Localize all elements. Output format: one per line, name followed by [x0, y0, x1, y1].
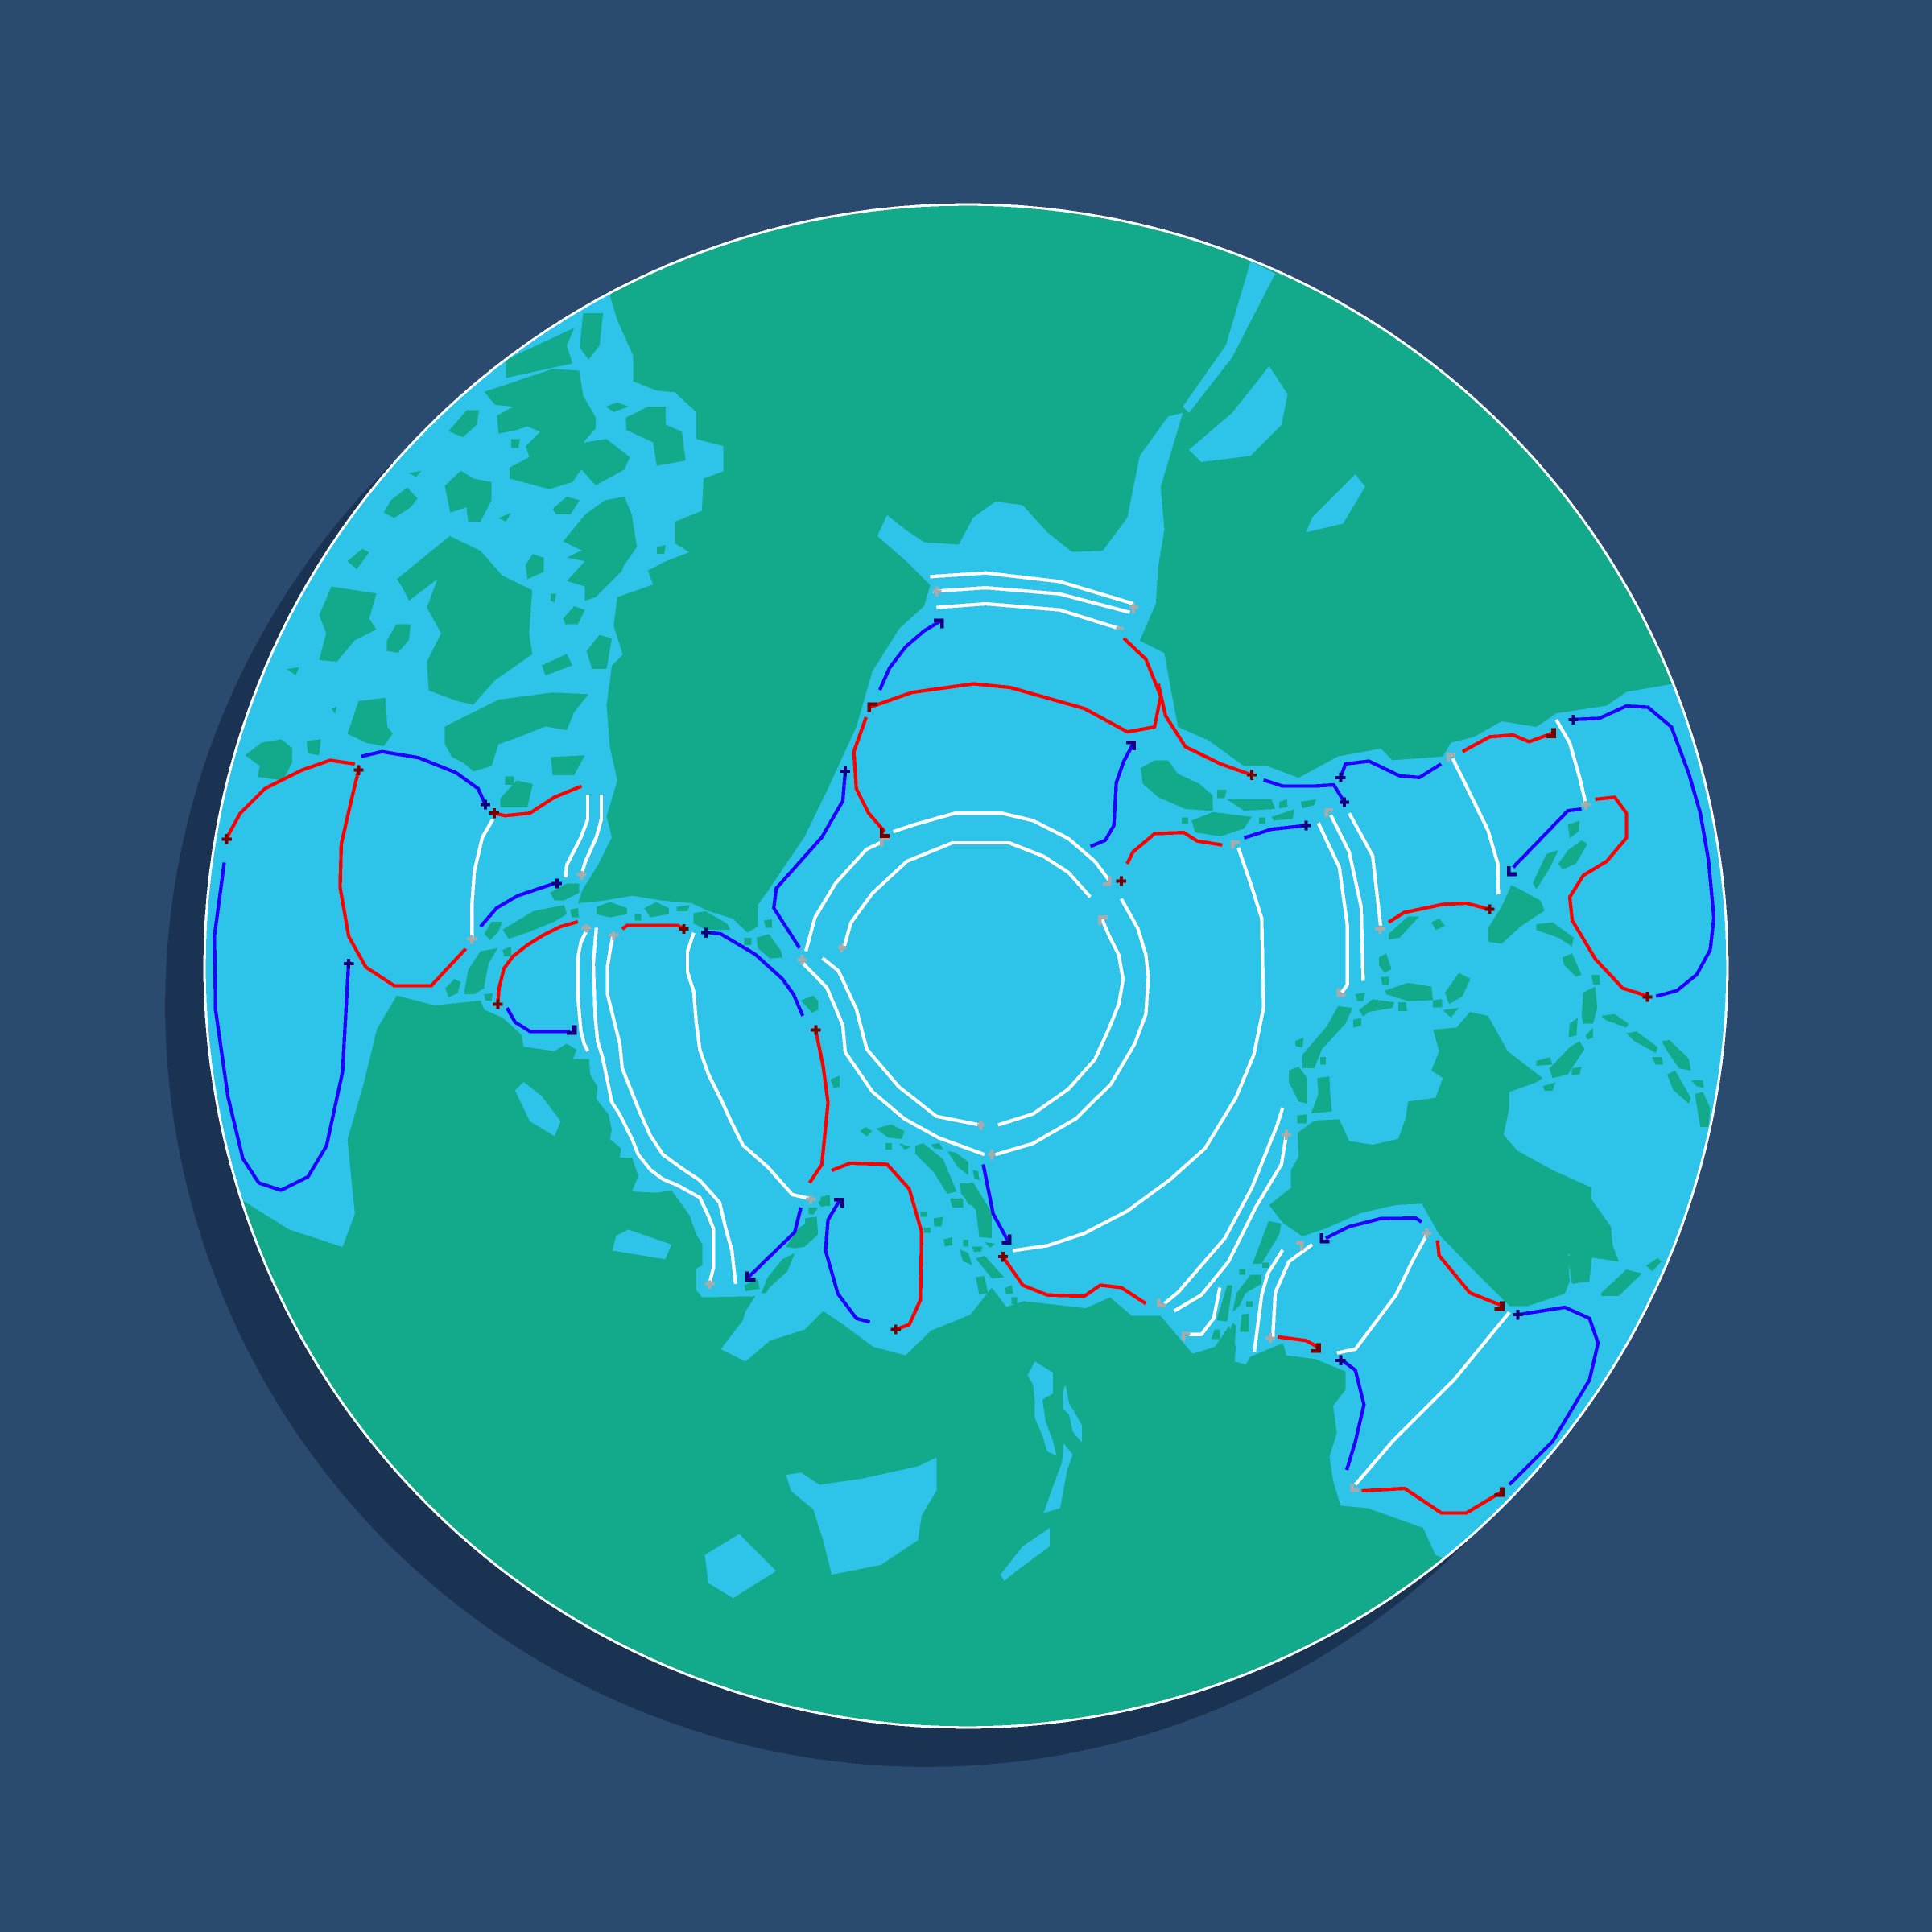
red routes centre — [810, 638, 1161, 1335]
disc outline — [204, 204, 1728, 1728]
central ring — [797, 813, 1149, 1159]
blue routes centre — [826, 618, 1136, 1322]
red routes west — [222, 760, 689, 1009]
red flow lines — [222, 638, 1653, 1513]
eastern arcs — [1013, 720, 1591, 1251]
land: southeastern strait islands — [1212, 1221, 1282, 1347]
blue routes west — [214, 752, 850, 1282]
main water body — [206, 295, 1726, 1558]
disc drop shadow — [165, 244, 1688, 1767]
northern arcs — [931, 573, 1138, 629]
land: northwestern archipelago — [246, 313, 686, 807]
land: eastern island chains — [1141, 760, 1710, 1296]
land: eastern peninsula — [1269, 1012, 1619, 1306]
disc land base — [204, 204, 1728, 1728]
map geography — [206, 261, 1726, 1598]
land: southern strait islands — [805, 1125, 1017, 1304]
western arcs — [467, 795, 815, 1289]
circular map figure — [165, 203, 1729, 1767]
land: western strait islands — [445, 883, 840, 1293]
southeastern arcs — [1157, 1108, 1509, 1492]
white flow lines — [467, 573, 1591, 1492]
blue routes east — [1244, 706, 1714, 1484]
lakes and inland channels — [515, 261, 1365, 1598]
red routes east — [1127, 683, 1653, 1513]
blue flow lines — [214, 618, 1714, 1484]
